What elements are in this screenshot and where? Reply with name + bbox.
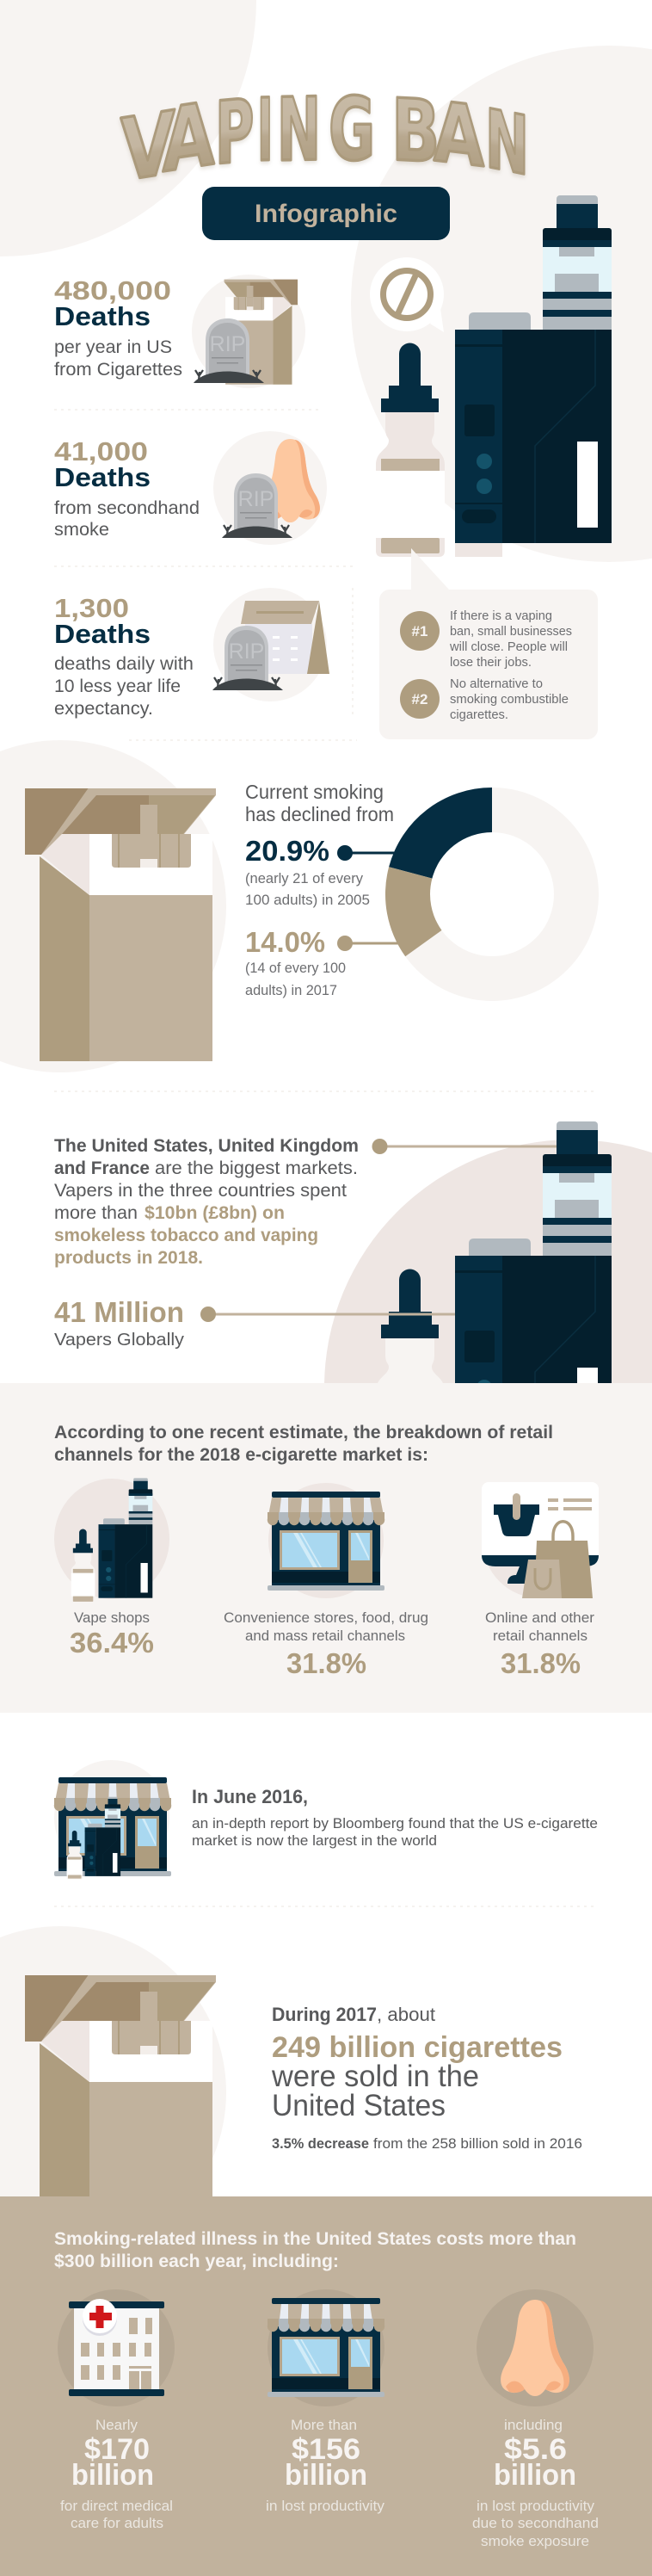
stat: 5.6 billion: $5.6 xyxy=(504,2433,567,2466)
stat: 5.6 billion: billion xyxy=(494,2459,576,2492)
panel: cost of smoking xyxy=(0,2196,652,2576)
icon: nose and gravestone xyxy=(213,431,327,545)
title: A xyxy=(434,84,484,186)
stat: 41,000 deaths: 41,000 xyxy=(54,436,148,466)
stat: 5.6 billion: including xyxy=(504,2417,563,2433)
stat: 5.6 billion xyxy=(472,2417,599,2549)
label: vape shops: Vape shops xyxy=(74,1609,150,1626)
text: June 2016: In June 2016, xyxy=(192,1786,308,1807)
donut chart xyxy=(337,788,576,979)
label: convenience stores xyxy=(224,1609,428,1679)
panel: arguments against ban: lose their jobs. xyxy=(450,655,532,670)
stat: 41,000 deaths: from secondhand xyxy=(54,498,200,518)
stat: 41,000 deaths: Deaths xyxy=(54,462,151,492)
heading: retail channels: channels for the 2018 e-cigarette market is: xyxy=(54,1445,428,1465)
title: G xyxy=(329,80,375,181)
illustration: cigarette pack xyxy=(0,1926,226,2196)
label: convenience stores: 31.8% xyxy=(286,1647,366,1679)
label: convenience stores: Convenience stores, food, drug xyxy=(224,1609,428,1626)
title: N xyxy=(277,79,321,181)
heading: cost of smoking xyxy=(54,2229,576,2271)
text: 249 billion cigarettes: from the 258 billion sold in 2016 xyxy=(373,2135,582,2152)
text: smoking decline: adults) in 2017 xyxy=(245,982,337,998)
illustration: vape device on circle xyxy=(324,1121,652,1383)
title: N xyxy=(485,91,529,195)
text: smoking decline: (nearly 21 of every xyxy=(245,870,363,886)
text: 249 billion cigarettes: United States xyxy=(272,2089,446,2122)
text: smoking decline: 14.0% xyxy=(245,926,325,958)
stat: 41,000 deaths: smoke xyxy=(54,520,109,540)
text: 249 billion cigarettes: , about xyxy=(377,2004,435,2025)
title: B xyxy=(391,80,440,182)
stat: 170 billion: Nearly xyxy=(95,2417,138,2433)
text: biggest markets: and France xyxy=(54,1158,150,1178)
text: June 2016 xyxy=(192,1786,598,1849)
icon: nose and gravestone: RIP xyxy=(238,487,274,511)
subtitle pill xyxy=(202,187,450,240)
icon: hospital xyxy=(58,2289,175,2406)
panel: arguments against ban xyxy=(379,548,598,739)
stat: 170 billion: $170 xyxy=(84,2433,150,2466)
label: online channels: retail channels xyxy=(493,1628,587,1644)
subtitle pill: Infographic xyxy=(255,200,397,228)
title: P xyxy=(215,81,254,184)
title: I xyxy=(257,80,274,181)
icon: vape shop xyxy=(54,1478,169,1603)
panel: arguments against ban: #1 xyxy=(412,623,427,639)
stat: 1,300 deaths: expectancy. xyxy=(54,699,153,719)
text: 249 billion cigarettes xyxy=(271,2004,582,2152)
stat: 156 billion: $156 xyxy=(292,2433,360,2466)
label: convenience stores: and mass retail channels xyxy=(245,1628,405,1644)
text: smoking decline xyxy=(245,781,394,998)
text: smoking decline: (14 of every 100 xyxy=(245,960,346,976)
icon: calendar and gravestone: RIP xyxy=(229,639,264,664)
stat: 480,000 deaths: 480,000 xyxy=(54,275,171,306)
stat: 156 billion xyxy=(266,2417,384,2514)
text: smoking decline: 20.9% xyxy=(245,835,329,867)
stat: 156 billion: More than xyxy=(291,2417,357,2433)
stat: 1,300 deaths: deaths daily with xyxy=(54,654,194,674)
icon: store xyxy=(268,2289,384,2406)
stat: 1,300 deaths: 10 less year life xyxy=(54,676,181,696)
icon: cigarette pack and gravestone xyxy=(192,275,305,388)
stat: 41 million vapers xyxy=(54,1296,455,1350)
text: smoking decline: has declined from xyxy=(245,803,394,825)
text: 249 billion cigarettes: 3.5% decrease xyxy=(272,2135,369,2152)
text: biggest markets: are the biggest markets. xyxy=(155,1158,358,1178)
stat: 170 billion: care for adults xyxy=(71,2515,163,2531)
stat: 170 billion xyxy=(60,2417,173,2531)
stat: 5.6 billion: due to secondhand xyxy=(472,2515,599,2531)
icon: calendar and gravestone xyxy=(212,588,329,701)
label: online channels: Online and other xyxy=(485,1609,594,1626)
icon: cigarette pack and gravestone: RIP xyxy=(210,332,245,356)
icon: online shopping xyxy=(482,1482,599,1598)
label: online channels xyxy=(485,1609,594,1679)
panel: arguments against ban: will close. People will xyxy=(449,639,568,654)
stat: 1,300 deaths: 1,300 xyxy=(54,593,129,623)
stat: 41 million vapers: 41 Million xyxy=(54,1296,184,1328)
stat: 41,000 deaths xyxy=(54,436,200,540)
panel: arguments against ban: smoking combustible xyxy=(450,692,569,707)
icon: nose xyxy=(477,2289,594,2406)
icon: storefront with vape xyxy=(54,1760,171,1880)
panel: arguments against ban: #2 xyxy=(412,691,427,707)
stat: 5.6 billion: smoke exposure xyxy=(481,2533,589,2549)
text: biggest markets: products in 2018. xyxy=(54,1248,203,1268)
text: biggest markets: $10bn (£8bn) on xyxy=(145,1203,285,1223)
panel: arguments against ban: cigarettes. xyxy=(450,707,508,722)
panel: arguments against ban: If there is a vaping xyxy=(450,608,552,623)
text: biggest markets xyxy=(54,1136,359,1268)
label: online channels: 31.8% xyxy=(501,1647,581,1679)
heading: cost of smoking: $300 billion each year, including: xyxy=(54,2252,339,2271)
stat: 480,000 deaths: per year in US xyxy=(54,337,172,357)
text: biggest markets: Vapers in the three countries spent xyxy=(54,1181,347,1201)
stat: 480,000 deaths: from Cigarettes xyxy=(54,360,182,380)
title: A xyxy=(163,83,214,193)
stat: 480,000 deaths: Deaths xyxy=(54,301,151,331)
text: 249 billion cigarettes: 249 billion cigarettes xyxy=(272,2031,563,2064)
text: 249 billion cigarettes: During 2017 xyxy=(272,2004,377,2025)
text: biggest markets: smokeless tobacco and vaping xyxy=(54,1226,318,1245)
icon: convenience store xyxy=(268,1483,384,1598)
stat: 41 million vapers: Vapers Globally xyxy=(54,1331,184,1350)
panel: arguments against ban: ban, small businesses xyxy=(450,624,572,639)
text: June 2016: an in-depth report by Bloomberg found that the US e-cigarette xyxy=(192,1815,598,1832)
panel: arguments against ban: No alternative to xyxy=(450,676,543,691)
text: smoking decline: 100 adults) in 2005 xyxy=(245,892,370,908)
stat: 170 billion: for direct medical xyxy=(60,2498,173,2514)
panel: retail channels xyxy=(0,1383,652,1713)
stat: 1,300 deaths: Deaths xyxy=(54,619,151,649)
text: June 2016: market is now the largest in the world xyxy=(192,1832,437,1849)
heading: retail channels xyxy=(54,1423,553,1465)
speech bubble: no symbol xyxy=(370,257,444,332)
illustration: large cigarette pack xyxy=(0,740,226,1072)
stat: 156 billion: billion xyxy=(285,2459,367,2492)
label: vape shops xyxy=(70,1609,154,1659)
title: V xyxy=(120,92,175,201)
title xyxy=(120,79,529,201)
stat: 480,000 deaths xyxy=(54,275,182,380)
stat: 156 billion: in lost productivity xyxy=(266,2498,384,2514)
text: biggest markets: The United States, United Kingdom xyxy=(54,1136,359,1156)
stat: 5.6 billion: in lost productivity xyxy=(477,2498,594,2514)
text: 249 billion cigarettes: were sold in the xyxy=(271,2060,479,2093)
pointer: markets xyxy=(372,1139,557,1154)
text: smoking decline: Current smoking xyxy=(245,781,384,803)
stat: 1,300 deaths xyxy=(54,593,194,719)
text: biggest markets: more than xyxy=(54,1203,138,1223)
illustration: vape device and e-liquid bottle xyxy=(376,195,612,557)
stat: 170 billion: billion xyxy=(71,2459,154,2492)
heading: cost of smoking: Smoking-related illness in the United States costs more than xyxy=(54,2229,576,2249)
heading: retail channels: According to one recent estimate, the breakdown of retail xyxy=(54,1423,553,1442)
label: vape shops: 36.4% xyxy=(70,1627,154,1659)
